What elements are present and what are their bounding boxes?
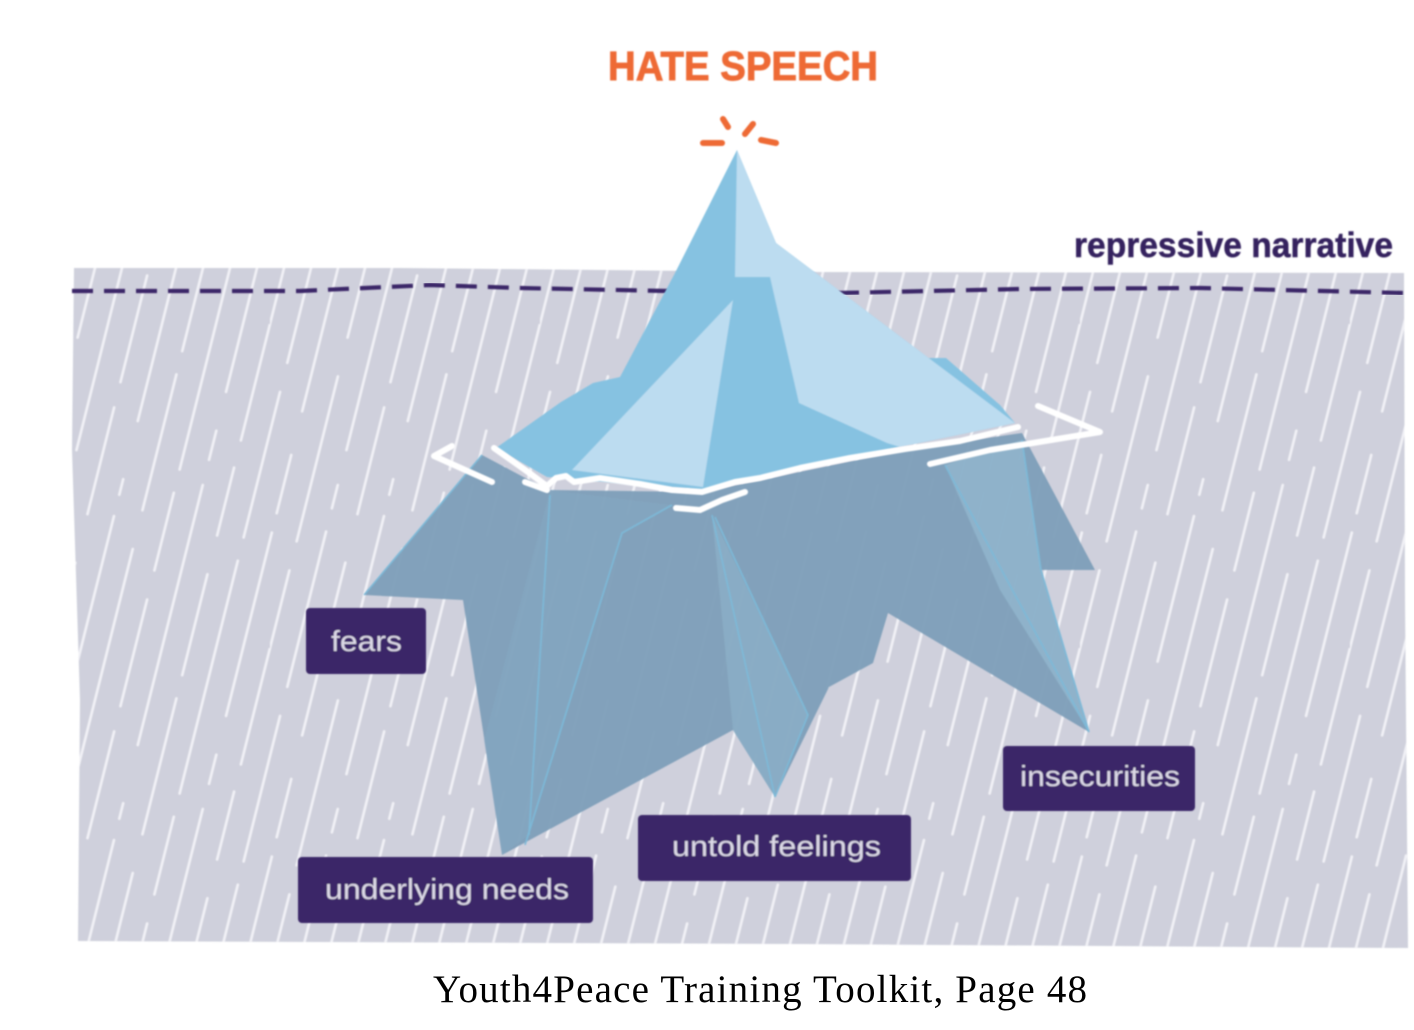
title: hate speech: HATE SPEECH — [608, 43, 878, 89]
label: insecurities: insecurities — [1020, 761, 1180, 793]
label: fears — [306, 608, 426, 674]
iceberg waterline outline — [434, 406, 1100, 510]
label: underlying needs — [298, 857, 593, 923]
label: untold feelings — [638, 815, 911, 881]
iceberg: submerged part — [364, 433, 1095, 855]
icon: orange sparks at peak — [703, 119, 776, 143]
label: fears: fears — [331, 626, 402, 658]
iceberg: visible tip — [496, 150, 1015, 490]
sea background with rain strokes — [60, 260, 1414, 960]
label: repressive narrative: repressive narrative — [1074, 226, 1393, 265]
label: untold feelings: untold feelings — [672, 831, 881, 863]
repressive narrative dashed line — [72, 285, 1404, 293]
caption: source: Youth4Peace Training Toolkit, Page 48 — [433, 968, 1087, 1011]
label: underlying needs: underlying needs — [325, 874, 569, 906]
label: insecurities — [1003, 746, 1195, 811]
